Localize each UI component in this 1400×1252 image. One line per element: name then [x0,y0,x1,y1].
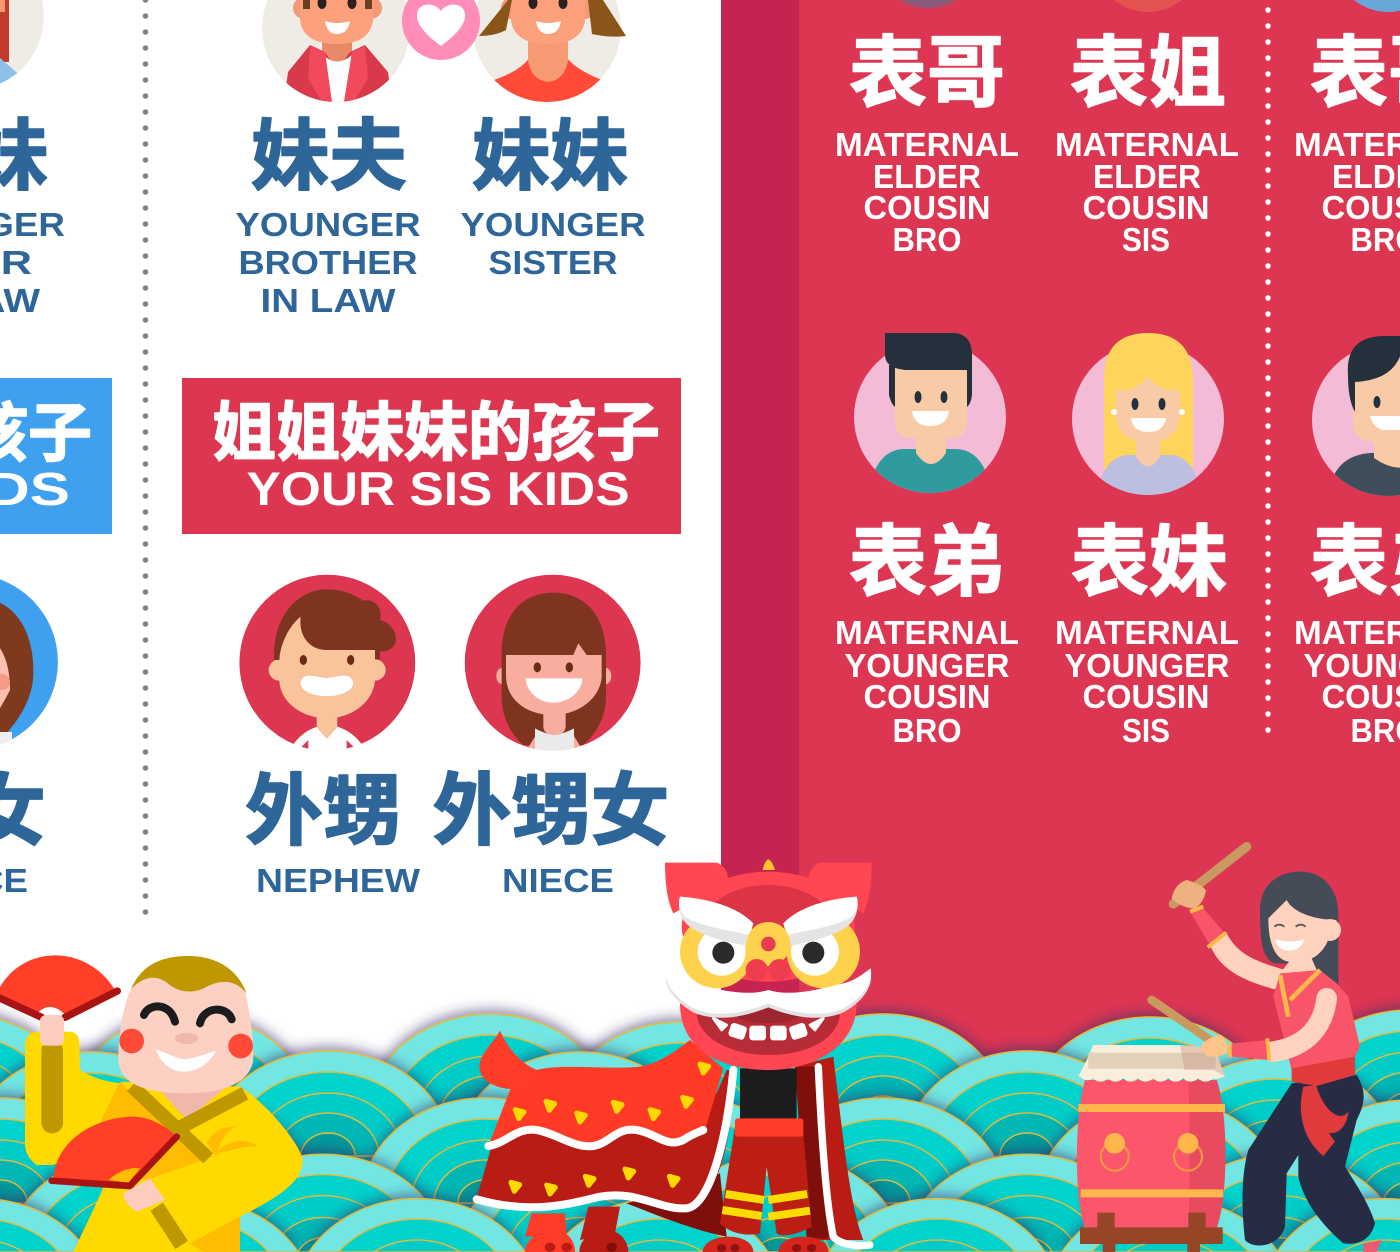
text: maternal elder cousin sis: MATERNAL [1055,126,1239,163]
text: maternal younger cousin sis: 表妹 [1071,518,1227,606]
text: maternal elder cousin sis [1055,29,1239,258]
text: nephew: 外甥 [245,767,401,855]
text: maternal younger cousin sis: SIS [1122,712,1170,749]
text: maternal younger cousin sis: COUSIN [1082,678,1210,715]
text: maternal younger cousin sis [1055,518,1239,749]
icon: left pigtail [479,0,512,36]
text: maternal elder cousin sis: COUSIN [1082,189,1210,226]
text: maternal elder cousin bro (cropped) [1294,29,1400,258]
avatar: cropped kid far left [0,574,58,752]
avatar: nephew [239,575,415,753]
text: maternal elder cousin bro: ELDER [873,158,981,195]
background: teal wave scales [0,1010,1400,1252]
text: nephew [245,767,421,899]
banner: your sis kids: 姐姐妹妹的孩子 [212,397,660,469]
panel: maternal relatives red panel [721,0,1400,1252]
avatar: maternal younger cousin bro [854,333,1006,500]
text: niece [432,766,670,899]
text: younger sister [460,112,646,281]
text: maternal younger cousin bro: BRO [892,712,962,749]
text: niece: NIECE [502,862,614,899]
text: niece: 外甥女 [432,766,670,855]
text: younger sister: 妹妹 [472,112,628,200]
avatars: top row cropped in red panel [875,0,1400,12]
illustration: woman drummer [1152,847,1382,1252]
text: maternal elder cousin sis: ELDER [1093,158,1201,195]
text: maternal elder cousin sis: 表姐 [1070,29,1226,117]
text: maternal elder cousin bro [835,29,1019,258]
avatar: younger brother in law [262,0,410,102]
icon: right pigtail [588,0,626,37]
text: maternal elder cousin bro: 表哥 [849,29,1005,117]
illustration: lion dance [477,859,872,1252]
text: younger brother in law: BROTHER [238,244,418,281]
avatar: younger sister [473,0,621,109]
text: younger sister: SISTER [488,244,618,281]
text: niece (cropped) [0,767,46,899]
text: maternal younger cousin sis: MATERNAL [1055,614,1239,651]
avatar: maternal younger cousin sis [1072,333,1224,500]
text: maternal younger cousin bro: MATERNAL [835,614,1019,651]
text: maternal elder cousin bro: COUSIN [864,189,990,226]
text: maternal younger cousin bro: YOUNGER [844,647,1010,684]
text: maternal elder cousin bro: BRO [892,221,962,258]
text: younger brother in law: 妹夫 [251,112,407,200]
illustration: drum [1077,1045,1225,1252]
text: maternal younger cousin bro: 表弟 [849,518,1005,606]
text: maternal younger cousin bro: COUSIN [864,678,990,715]
icon: heart badge [402,0,480,60]
banner: your sis kids [182,378,681,534]
text: maternal younger cousin sis: YOUNGER [1064,647,1230,684]
text: maternal younger cousin bro [835,518,1019,749]
avatar: cropped person far left [0,0,44,84]
panel: white family panel [0,0,721,1252]
text: younger sister in law (cropped) [0,112,65,319]
text: younger brother in law [236,112,421,319]
text: maternal elder cousin bro: MATERNAL [835,126,1019,163]
avatar: niece [465,575,641,753]
illustration: monk with fans [0,955,303,1252]
text: nephew: NEPHEW [256,862,421,899]
text: younger brother in law: IN LAW [260,282,396,319]
text: younger sister: YOUNGER [460,206,646,243]
banner: your bro kids (cropped, blue) [0,378,112,534]
banner: your sis kids: YOUR SIS KIDS [246,462,630,515]
text: younger brother in law: YOUNGER [236,206,421,243]
text: maternal elder cousin sis: SIS [1122,221,1170,258]
avatar: maternal younger cousin bro (cropped) [1312,336,1400,500]
text: maternal younger cousin bro (cropped) [1294,518,1400,749]
